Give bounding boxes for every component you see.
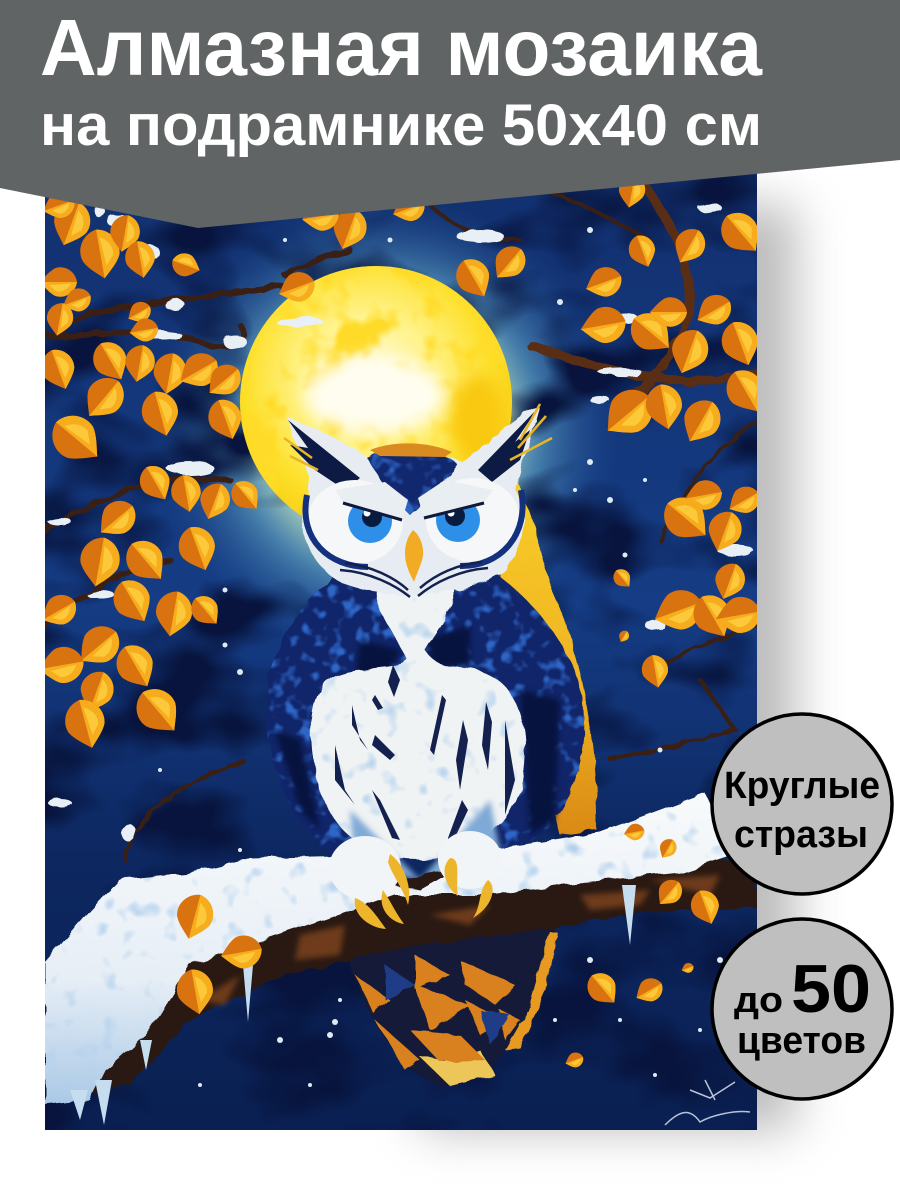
badge: up to 50 colours: до <box>734 979 783 1020</box>
moon glow <box>176 214 599 622</box>
beak <box>405 530 423 582</box>
badge: up to 50 colours: цветов <box>737 1020 866 1062</box>
breast lower fan <box>350 800 500 885</box>
header banner <box>0 0 900 228</box>
snow flakes <box>158 227 723 1087</box>
snow on branches <box>48 203 753 841</box>
full moon <box>240 266 512 538</box>
snowy tree branch <box>45 793 757 1125</box>
owl <box>266 403 597 1086</box>
badge: round rhinestones <box>712 714 892 894</box>
facial ruff <box>340 562 488 597</box>
breast markings <box>335 665 515 848</box>
owl tail <box>345 925 557 1086</box>
artist signature <box>665 1080 750 1125</box>
owl head <box>287 403 540 594</box>
badge: up to 50 colours: 50 <box>791 951 871 1027</box>
title: Алмазная мозаика <box>40 3 762 92</box>
branch wood <box>60 860 757 1100</box>
dark night patches <box>45 170 757 1130</box>
white breast <box>311 575 525 860</box>
autumn leaves <box>35 173 773 753</box>
icicles <box>70 885 636 1125</box>
badge: up to 50 colours <box>712 919 892 1099</box>
dark wing strokes <box>275 625 560 835</box>
golden back feathers <box>500 462 597 835</box>
owl painting <box>35 170 773 1130</box>
eye discs <box>305 478 523 567</box>
badge: round rhinestones: стразы <box>734 814 868 856</box>
owl talons <box>329 831 502 929</box>
badge: round rhinestones: Круглые <box>724 765 880 807</box>
fallen leaves <box>171 822 725 1070</box>
branch snow <box>45 793 746 1105</box>
canvas shadow <box>420 205 796 1130</box>
forehead <box>367 449 458 515</box>
owl eyes <box>335 480 493 543</box>
subtitle: на подрамнике 50х40 см <box>40 93 762 158</box>
owl body <box>266 565 584 860</box>
bare branches <box>45 178 757 860</box>
ear tufts <box>284 404 552 490</box>
